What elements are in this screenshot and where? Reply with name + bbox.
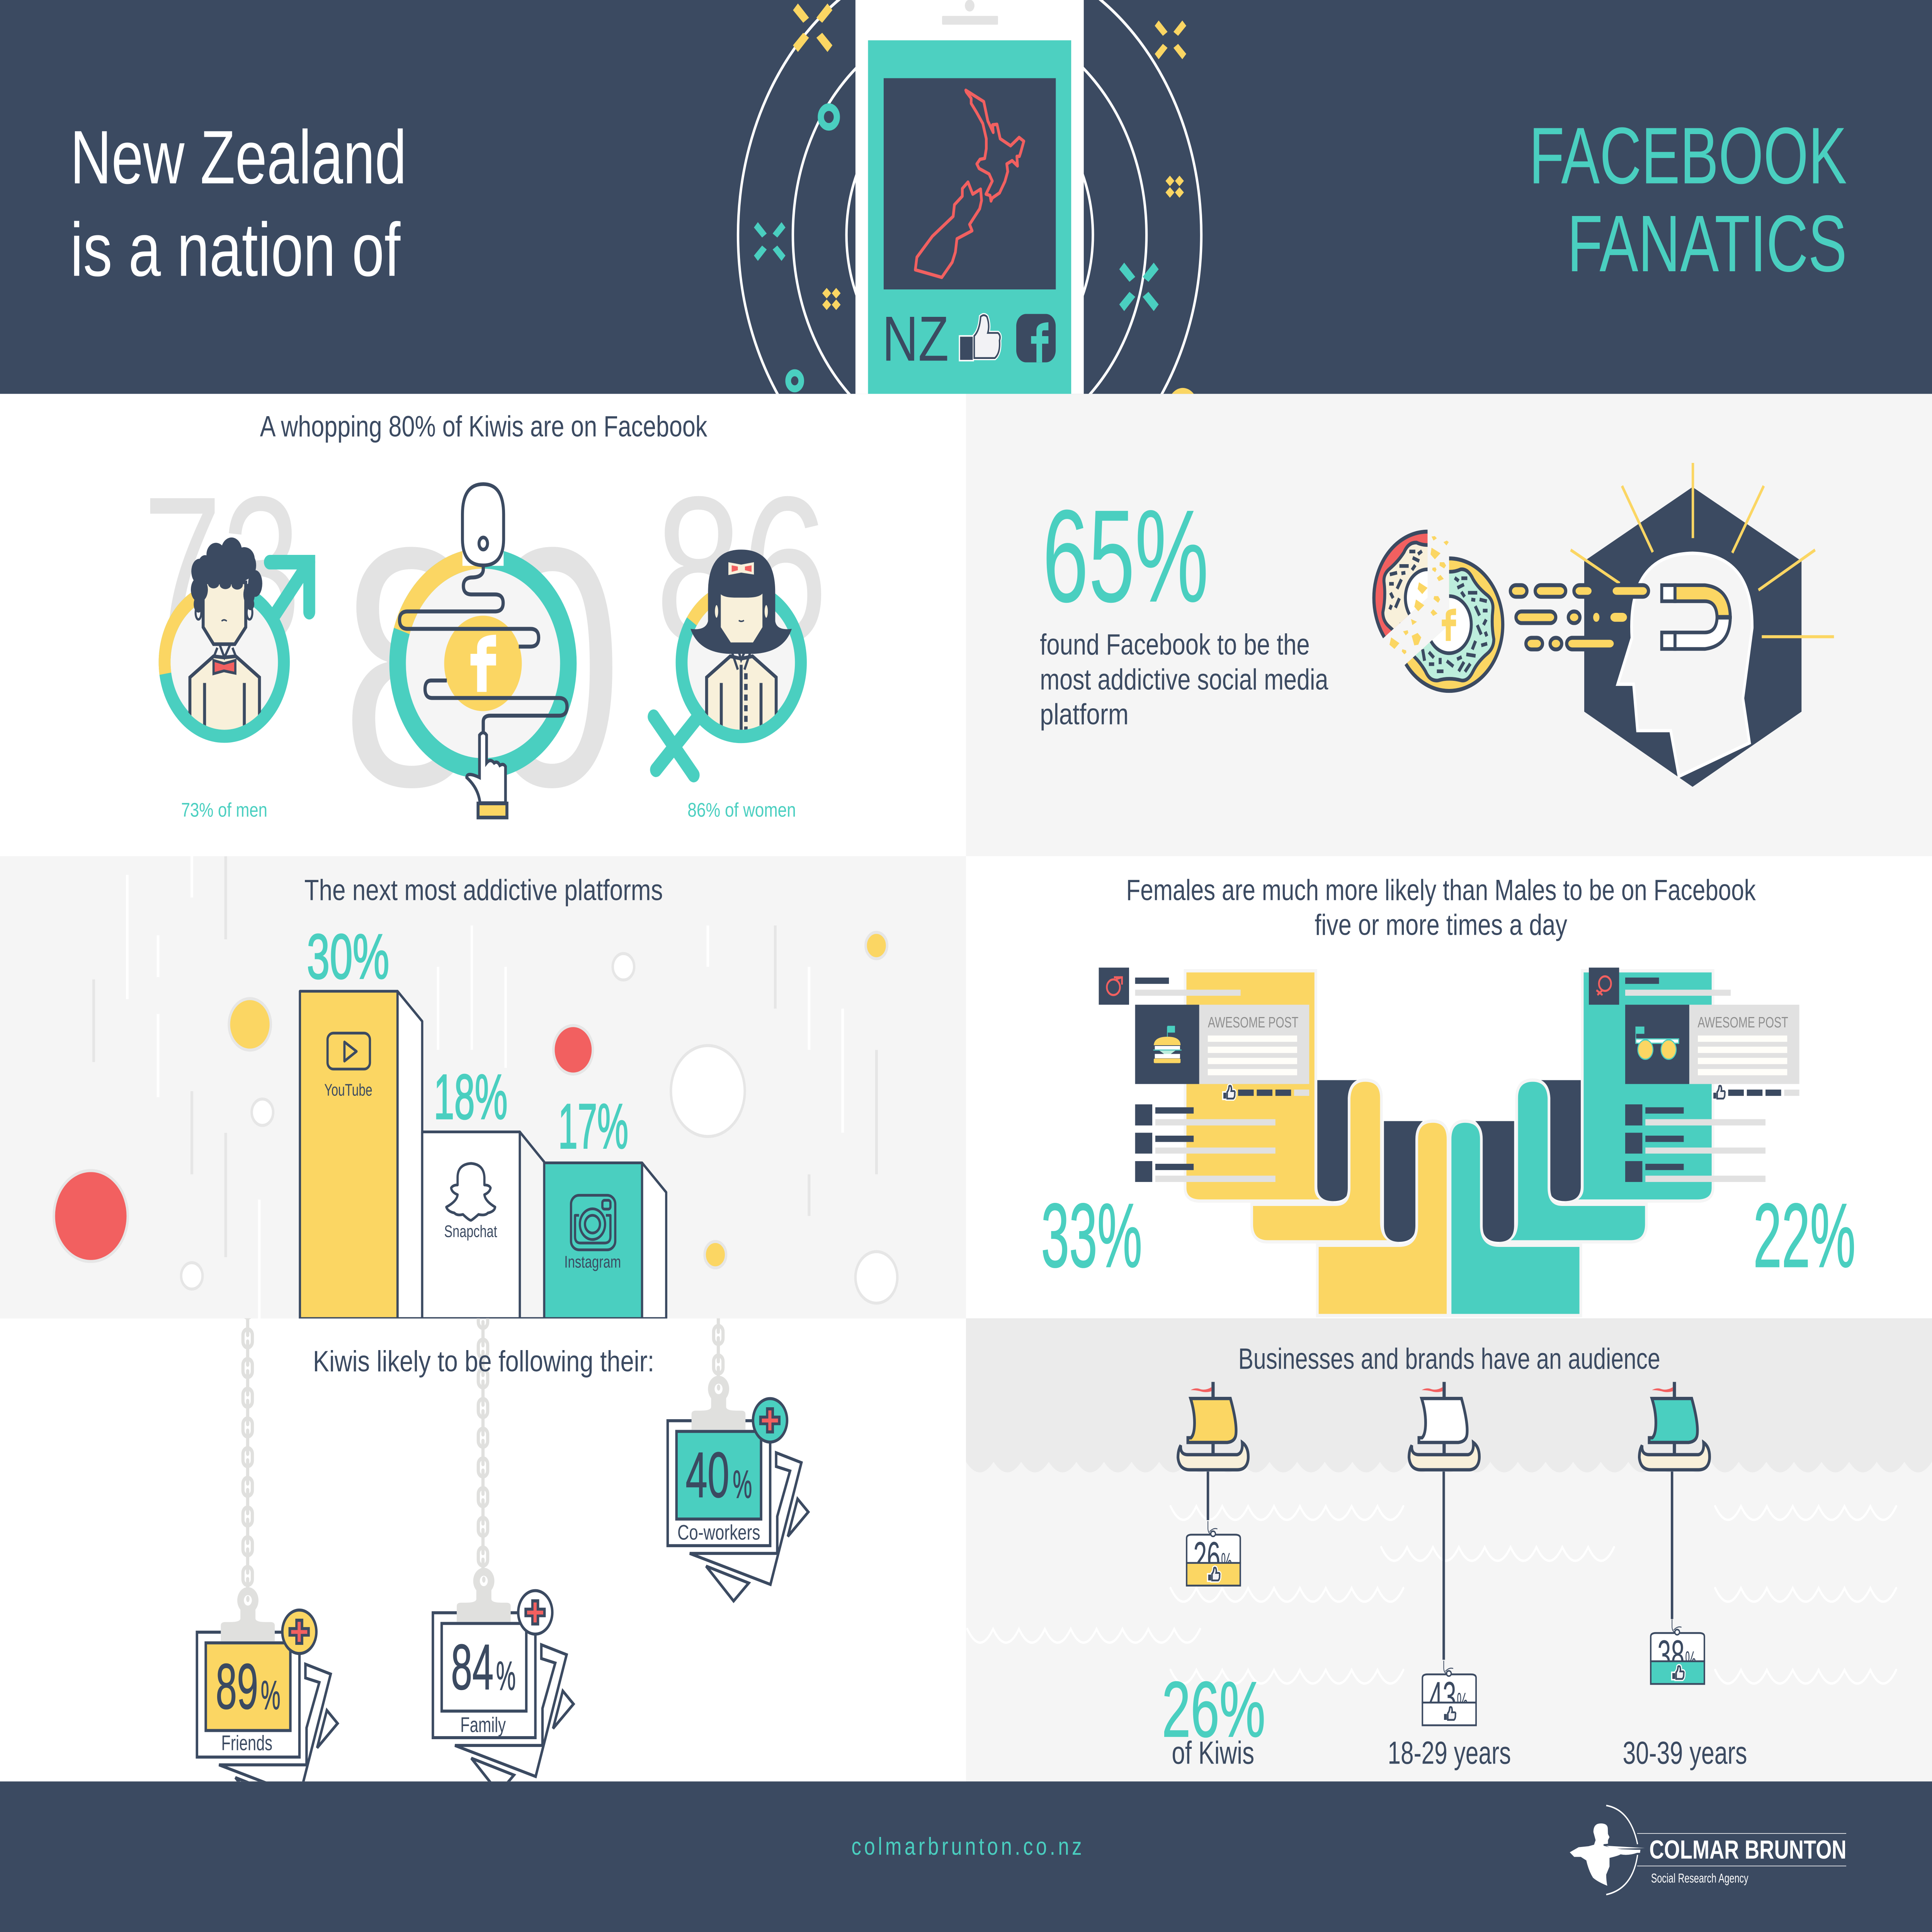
description: platform bbox=[1040, 697, 1129, 731]
illustration: two hands bbox=[1185, 971, 1713, 1316]
attraction particles bbox=[1510, 585, 1648, 650]
caption women: 86% of women bbox=[687, 799, 796, 821]
big grey numbers: 80 bbox=[341, 477, 622, 857]
head silhouette bbox=[1618, 553, 1752, 776]
illustration: donut and magnet head bbox=[1374, 463, 1834, 787]
donut: main slice bbox=[1395, 558, 1503, 691]
cuff bbox=[478, 803, 507, 818]
boat: 18-29 bbox=[1409, 1382, 1479, 1725]
description bbox=[1040, 628, 1328, 731]
bar: YouTube bbox=[300, 991, 422, 1318]
phone screen bbox=[868, 40, 1071, 394]
post labels: AWESOME POST bbox=[1697, 1014, 1788, 1031]
concentric signal rings bbox=[736, 0, 1202, 394]
stat: 26%: 26% bbox=[1162, 1666, 1265, 1753]
stats: 30% bbox=[307, 921, 389, 992]
decorative crosses and rings bbox=[754, 3, 1186, 389]
section title: The next most addictive platforms bbox=[304, 873, 663, 906]
panel: females vs males five or more times a day bbox=[966, 856, 1932, 1318]
stat: friends: 89 bbox=[216, 1651, 258, 1723]
decorative rain lines right bbox=[708, 925, 876, 1216]
bar: Snapchat bbox=[422, 1132, 544, 1318]
crumbs bbox=[1389, 536, 1449, 654]
stat: family bbox=[451, 1631, 516, 1736]
rays bbox=[1571, 463, 1834, 637]
bar labels bbox=[324, 1081, 621, 1271]
big grey numbers bbox=[143, 453, 828, 857]
icon: thumbs up bbox=[959, 315, 1000, 361]
stat: 65%: 65% bbox=[1043, 483, 1209, 629]
stat: 22% females: 22% bbox=[1753, 1185, 1855, 1286]
captions: 18-29 years bbox=[1388, 1735, 1511, 1770]
icon: sunglasses bbox=[1636, 1027, 1679, 1059]
captions: of Kiwis bbox=[1172, 1735, 1254, 1770]
icon: burger bbox=[1153, 1026, 1182, 1063]
stat: co-workers: 40 bbox=[685, 1439, 730, 1511]
tag text: 43%: % bbox=[1457, 1688, 1468, 1717]
donut f logo bbox=[1442, 609, 1456, 641]
description: most addictive social media bbox=[1040, 663, 1328, 696]
section title bbox=[1126, 873, 1756, 941]
donut: broken slice bbox=[1374, 532, 1481, 664]
stat: friends: % bbox=[261, 1673, 281, 1718]
stats: 18% bbox=[434, 1061, 508, 1132]
stats bbox=[307, 921, 628, 1162]
stat: co-workers: % bbox=[733, 1462, 752, 1506]
icon: Facebook f bbox=[471, 635, 496, 692]
panel: 65% addictive bbox=[966, 394, 1932, 856]
panel: header banner bbox=[0, 0, 1932, 394]
logo text bbox=[1649, 1835, 1847, 1885]
yellow dot at header edge bbox=[1172, 388, 1194, 394]
stat: family: Family bbox=[460, 1713, 506, 1736]
post cards bbox=[1099, 968, 1799, 1182]
cable bbox=[400, 566, 567, 733]
map panel bbox=[884, 78, 1056, 289]
logo: archer bbox=[1570, 1806, 1846, 1895]
NZ label: NZ bbox=[882, 303, 949, 374]
pointing hand bbox=[467, 733, 505, 803]
chains bbox=[243, 1296, 723, 1602]
illustration: mouse, cable and hand bbox=[400, 484, 567, 818]
bar labels: Instagram bbox=[564, 1253, 621, 1271]
phone speaker bbox=[942, 0, 998, 25]
ring: women 86% bbox=[682, 589, 801, 736]
stat: 33% males: 33% bbox=[1041, 1185, 1142, 1286]
stat: co-workers bbox=[677, 1439, 760, 1544]
section title: A whopping 80% of Kiwis are on Facebook bbox=[260, 410, 707, 443]
stat: co-workers: Co-workers bbox=[677, 1520, 760, 1544]
post labels: AWESOME POST bbox=[1208, 1014, 1298, 1031]
logo text: Social Research Agency bbox=[1651, 1871, 1748, 1885]
section title: five or more times a day bbox=[1315, 908, 1567, 941]
big grey numbers: 86 bbox=[655, 453, 828, 685]
headline right: FANATICS bbox=[1567, 199, 1847, 289]
male card bbox=[1099, 968, 1309, 1182]
white wave lines bbox=[967, 1506, 1896, 1684]
stat: friends: Friends bbox=[221, 1731, 272, 1755]
panel: 80% of Kiwis on Facebook bbox=[0, 394, 966, 857]
bar labels: YouTube bbox=[324, 1081, 372, 1099]
illustration: man bbox=[190, 537, 262, 747]
headline left bbox=[70, 115, 406, 292]
section title: Females are much more likely than Males to be on Facebook bbox=[1126, 873, 1756, 906]
stats: 17% bbox=[558, 1090, 628, 1162]
headline left: is a nation of bbox=[70, 207, 401, 292]
ring: men 73% bbox=[165, 589, 284, 736]
post labels bbox=[1208, 1014, 1788, 1031]
illustration: woman bbox=[690, 549, 792, 747]
tag text: 38%: % bbox=[1685, 1646, 1696, 1676]
stat: family: 84 bbox=[451, 1631, 493, 1703]
tag text: 26%: % bbox=[1221, 1548, 1232, 1577]
decorative rain lines centre bbox=[438, 925, 505, 1068]
phone body bbox=[855, 0, 1084, 394]
tag text: 43%: 43 bbox=[1429, 1673, 1456, 1720]
icons: small thumbs bbox=[1223, 1086, 1725, 1099]
panel: next most addictive platforms bbox=[0, 856, 966, 1318]
ring: all Kiwis 80% bbox=[398, 558, 568, 769]
tag text: 38%: 38 bbox=[1657, 1631, 1685, 1679]
bar labels: Snapchat bbox=[444, 1222, 497, 1241]
big grey numbers: 73 bbox=[143, 453, 301, 685]
section title: Kiwis likely to be following their: bbox=[313, 1345, 654, 1378]
boat: 30-39 bbox=[1639, 1382, 1709, 1684]
stat: friends bbox=[216, 1651, 281, 1755]
decorative rain lines left bbox=[94, 856, 259, 1318]
captions: 30-39 years bbox=[1622, 1735, 1747, 1770]
polaroid: co-workers bbox=[668, 1376, 808, 1601]
icon: Facebook square bbox=[1016, 314, 1056, 362]
captions bbox=[1172, 1735, 1747, 1770]
stat: family: % bbox=[496, 1653, 516, 1699]
panel: businesses and brands audience bbox=[966, 1318, 1932, 1781]
magnet bbox=[1662, 585, 1730, 649]
boats and hooks bbox=[1178, 1382, 1709, 1725]
bar: Instagram bbox=[544, 1163, 666, 1318]
website: colmarbrunton.co.nz bbox=[851, 1833, 1082, 1860]
polaroid: friends bbox=[197, 1587, 338, 1813]
female symbol cross bbox=[654, 717, 696, 775]
headline left: New Zealand bbox=[70, 115, 406, 199]
section title: Businesses and brands have an audience bbox=[1238, 1342, 1660, 1375]
mouse bbox=[463, 484, 503, 566]
hexagon bbox=[1584, 487, 1801, 787]
description: found Facebook to be the bbox=[1040, 628, 1310, 661]
decorative circles bbox=[54, 932, 897, 1303]
tag text: 26%: 26 bbox=[1193, 1533, 1220, 1581]
caption men: 73% of men bbox=[181, 799, 267, 821]
boat: all Kiwis bbox=[1178, 1382, 1248, 1586]
polaroid: family bbox=[433, 1568, 573, 1793]
headline right: FACEBOOK bbox=[1529, 111, 1847, 201]
sky band bbox=[966, 1318, 1932, 1473]
headline right bbox=[1529, 111, 1847, 289]
female card bbox=[1589, 968, 1799, 1182]
tag thumbs bbox=[1208, 1568, 1684, 1721]
logo text: COLMAR BRUNTON bbox=[1649, 1835, 1847, 1865]
map of New Zealand bbox=[915, 90, 1024, 277]
male symbol arrow bbox=[269, 562, 309, 624]
panel: Kiwis likely to be following bbox=[0, 1296, 966, 1813]
panel: footer bbox=[0, 1781, 1932, 1932]
